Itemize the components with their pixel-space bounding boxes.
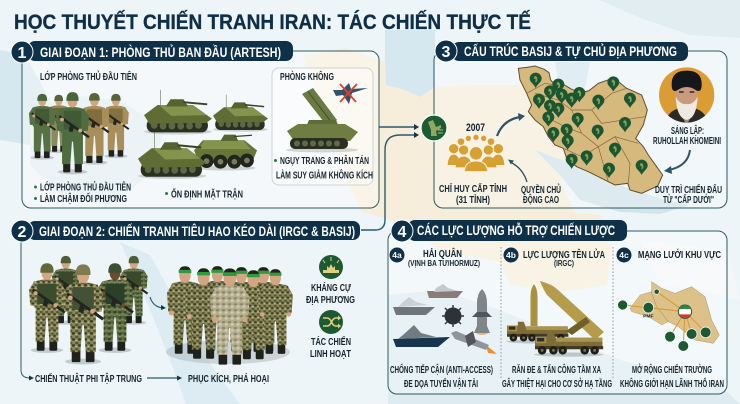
bullet: camouflage — [274, 154, 373, 182]
header 1 — [11, 41, 293, 63]
label: flexible tactics: LINH HOẠT — [310, 348, 351, 360]
label: first defence line: LỚP PHÒNG THỦ ĐẦU TIÊN — [40, 70, 137, 83]
heading: missile force: LỰC LƯỢNG TÊN LỬA — [523, 248, 605, 261]
label: provincial command: CHỈ HUY CẤP TỈNH — [439, 182, 507, 195]
badge 4b: 4b — [506, 250, 516, 260]
column 4a: navy — [390, 247, 497, 390]
icon: crowd of commanders — [448, 135, 504, 172]
icon: flexible tactics — [319, 310, 343, 334]
label: deterrence: RĂN ĐE & TẤN CÔNG TẦM XA — [512, 363, 601, 376]
label: deterrence — [502, 363, 612, 390]
bullets: first line — [34, 180, 131, 205]
header 2: 2 — [18, 224, 27, 241]
panel 4: strategic support forces — [388, 220, 727, 394]
label: expanded battlefield — [620, 363, 724, 390]
label: founder: SÁNG LẬP: — [671, 124, 704, 137]
icon: SAM launcher — [286, 88, 358, 152]
icon: ballistic missile launchers — [506, 281, 604, 357]
label: anti-access: ĐE DỌA TUYẾN VẬN TẢI — [404, 377, 478, 390]
heading: missile force — [523, 248, 605, 268]
arrow: crowd to map — [497, 113, 525, 136]
header 2 — [11, 220, 360, 242]
map: Iran provinces with pins — [518, 66, 663, 193]
icon: naval mine — [442, 305, 464, 327]
badge 4a — [390, 248, 404, 262]
column 4b: missile force — [502, 248, 612, 390]
badge 4b — [504, 248, 518, 262]
header 4: 4 — [398, 224, 407, 241]
label: flexible tactics: TÁC CHIẾN — [311, 335, 351, 348]
label: anti-access: CHỐNG TIẾP CẬN (ANTI-ACCESS) — [390, 362, 493, 376]
label: local resistance: ĐỊA PHƯƠNG — [306, 294, 355, 306]
icon: local resistance — [319, 255, 343, 279]
label: high initiative: QUYỀN CHỦ — [521, 183, 561, 196]
label: local resistance: KHÁNG CỰ — [311, 281, 351, 294]
header 1: GIAI ĐOẠN 1: PHÒNG THỦ BAN ĐẦU (ARTESH) — [40, 43, 281, 60]
header 4: CÁC LỰC LƯỢNG HỖ TRỢ CHIẾN LƯỢC — [417, 221, 615, 238]
header 3 — [435, 40, 688, 62]
label: anti-access — [390, 362, 493, 390]
divider — [612, 247, 614, 378]
label: flexible tactics — [310, 335, 351, 360]
map: regional network: PMF — [643, 313, 654, 319]
portrait: founder — [659, 67, 714, 127]
icon: IRGC emblem — [421, 115, 447, 141]
label: high initiative: ĐỘNG CAO — [523, 193, 559, 206]
bullet: front stabilisation — [165, 188, 243, 200]
soldiers: Basij — [166, 266, 293, 365]
label: local resistance — [306, 281, 355, 306]
heading: navy: HẢI QUÂN — [423, 247, 462, 260]
label: year: 2007 — [466, 122, 485, 134]
panel 1: initial defence — [11, 41, 379, 208]
header 3: 3 — [442, 44, 451, 61]
label: decentralised tactics: CHIẾN THUẬT PHI TẬP TRUNG — [35, 372, 142, 385]
column 4c: regional network — [616, 248, 724, 390]
icon: cruise missile — [451, 331, 497, 354]
arrow: tactics to ambush — [147, 376, 182, 380]
label: provincial command: (31 TỈNH) — [456, 193, 490, 206]
arrow: initiative to crowd — [508, 160, 527, 182]
header 1: 1 — [18, 45, 27, 62]
bullets: first line: LÀM CHẬM ĐỐI PHƯƠNG — [40, 191, 127, 205]
vehicles: armour — [138, 90, 268, 179]
badge 4a: 4a — [392, 250, 402, 260]
label: deterrence: GÂY THIỆT HẠI CHO CƠ SỞ HẠ TẦNG — [502, 377, 612, 390]
map: regional network — [618, 282, 719, 351]
label: bottom-up fight — [655, 183, 722, 206]
inset: air defence: PHÒNG KHÔNG — [280, 70, 334, 83]
label: founder — [653, 124, 721, 147]
divider — [500, 247, 502, 378]
icon: fast boats — [393, 284, 463, 347]
label: high initiative — [521, 183, 561, 206]
panel 3: Basij structure — [434, 40, 727, 208]
bullets: first line: LỚP PHÒNG THỦ ĐẦU TIÊN — [40, 180, 131, 194]
header 4 — [391, 220, 627, 242]
arrow: IRGC to Basij — [150, 297, 166, 310]
bullet: front stabilisation: ỔN ĐỊNH MẶT TRẬN — [171, 188, 243, 200]
panel 2: attrition war — [11, 220, 360, 385]
soldiers: Artesh — [29, 92, 129, 174]
badge 4c — [616, 248, 632, 262]
label: ambush: PHỤC KÍCH, PHÁ HOẠI — [188, 372, 269, 385]
bullet: camouflage: LÀM SUY GIẢM KHÔNG KÍCH — [276, 168, 373, 182]
heading: missile force: (IRGC) — [554, 259, 574, 268]
heading: navy: (VỊNH BA TƯ/HORMUZ) — [408, 259, 480, 268]
title: HỌC THUYẾT CHIẾN TRANH IRAN: TÁC CHIẾN THỰC TẾ — [14, 9, 531, 34]
arrow: founder to map — [664, 150, 690, 174]
icon: crossed-out jet — [333, 83, 368, 104]
bullet: camouflage: NGỤY TRANG & PHÂN TÁN — [280, 154, 369, 167]
connector: phases to emblem — [361, 124, 419, 230]
inset: air defence — [272, 68, 373, 185]
label: provincial command — [439, 182, 507, 206]
icon: vertical missile — [472, 289, 492, 335]
heading: navy — [408, 247, 480, 268]
badge 4c: 4c — [619, 250, 629, 260]
soldiers: IRGC — [29, 256, 148, 365]
header 2: GIAI ĐOẠN 2: CHIẾN TRANH TIÊU HAO KÉO DÀI (IRGC & BASIJ) — [39, 222, 355, 239]
